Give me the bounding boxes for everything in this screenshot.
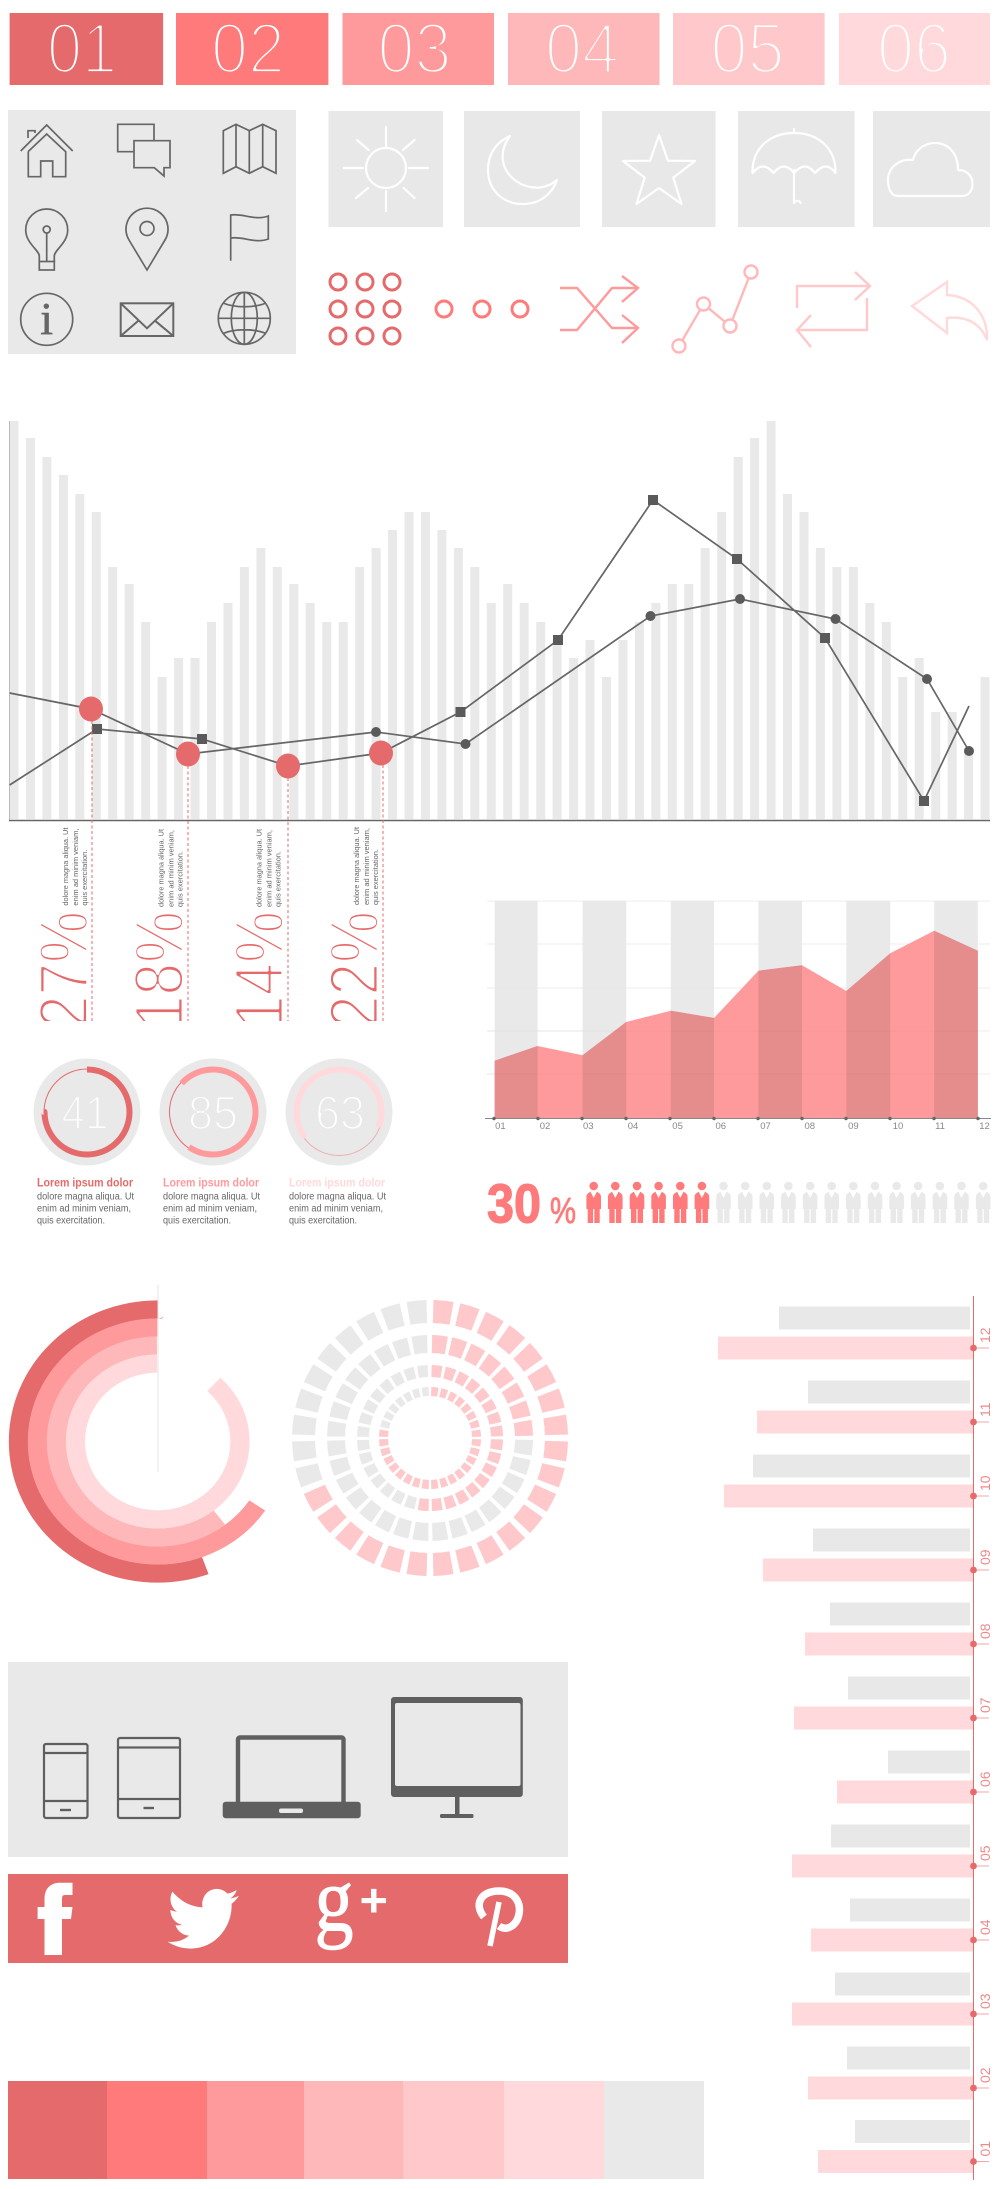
caption 3: dolore magna aliqua. Ut <box>289 1191 386 1202</box>
icon: phone <box>44 1744 88 1818</box>
area axis labels: 12 <box>979 1121 990 1132</box>
icon: envelope <box>121 303 173 336</box>
tile: cloud <box>873 111 990 227</box>
icon: tablet <box>118 1738 180 1818</box>
chart bars <box>14 421 985 819</box>
callout 18%: dolore magna aliqua. Ut <box>156 828 166 907</box>
caption 1: dolore magna aliqua. Ut <box>37 1191 134 1202</box>
caption 3: quis exercitation. <box>289 1216 357 1227</box>
coral line icons row <box>330 266 987 352</box>
area axis labels: 02 <box>540 1121 550 1132</box>
callout 18%: enim ad minim veniam, <box>166 830 176 907</box>
second ring <box>336 1344 524 1532</box>
area axis labels: 03 <box>583 1121 594 1132</box>
tab 04: 04 <box>545 10 619 89</box>
icon: map pin <box>126 208 168 270</box>
gauge 85: 85 <box>188 1086 238 1139</box>
axis labels: 11 <box>977 1402 993 1417</box>
highlighted people <box>586 1182 709 1223</box>
numbered tabs row <box>10 10 990 89</box>
vertical axis <box>972 1296 974 2180</box>
axis labels: 09 <box>977 1549 993 1565</box>
icon: globe <box>218 292 270 344</box>
icon: monitor <box>391 1697 523 1818</box>
callout 27% <box>40 696 103 1021</box>
caption 2: enim ad minim veniam, <box>163 1204 257 1215</box>
segmented radial chart <box>304 1312 556 1564</box>
gauge 41: 41 <box>62 1086 108 1139</box>
axis labels: 06 <box>977 1771 993 1787</box>
icon: shuffle <box>560 276 638 343</box>
tab 01 <box>10 10 163 89</box>
icon: reply arrow <box>912 282 987 340</box>
area axis labels: 05 <box>672 1121 683 1132</box>
callout 22% <box>330 740 393 1021</box>
inner ring <box>384 1392 476 1484</box>
tab 05: 05 <box>710 10 784 89</box>
concentric arc chart <box>18 1285 297 1574</box>
icon: google plus <box>314 1849 388 1950</box>
area chart grey columns <box>495 901 978 1118</box>
tile: moon <box>464 111 580 227</box>
axis labels: 10 <box>977 1475 993 1491</box>
callout 14%: quis exercitation. <box>274 851 282 907</box>
area chart <box>485 901 991 1132</box>
axis labels: 04 <box>977 1919 993 1935</box>
axis labels: 05 <box>977 1845 993 1861</box>
social media bar <box>8 1849 568 1963</box>
grey bars <box>753 1306 970 2143</box>
panel: outline icons <box>8 110 296 354</box>
icon: light bulb <box>26 209 68 270</box>
area axis labels: 04 <box>628 1121 638 1132</box>
round markers <box>371 594 974 756</box>
gauge 63: 63 <box>315 1086 365 1139</box>
tab 05 <box>673 10 825 89</box>
gauges with captions <box>34 1058 392 1227</box>
icon: three dots <box>436 301 528 317</box>
colour palette <box>8 2081 704 2179</box>
icon: laptop <box>223 1738 361 1818</box>
callout 27%: quis exercitation. <box>80 850 89 906</box>
icon: flag <box>231 215 268 261</box>
callout 27%: 27% <box>24 911 102 1028</box>
callout 22%: quis exercitation. <box>371 849 380 905</box>
grey people <box>716 1182 990 1223</box>
tab 02: 02 <box>211 10 285 89</box>
caption 2 <box>163 1178 260 1227</box>
area darker bands <box>495 931 978 1118</box>
axis labels: 03 <box>977 1993 993 2009</box>
icon: info <box>21 293 73 345</box>
outer ring <box>304 1312 556 1564</box>
icon: google plus: g <box>314 1849 354 1950</box>
third ring <box>363 1371 497 1505</box>
icon: dot grid <box>330 274 400 344</box>
chart axis <box>9 820 990 822</box>
caption 2: quis exercitation. <box>163 1216 231 1227</box>
area shape <box>495 931 978 1118</box>
callout 27%: enim ad minim veniam, <box>71 829 80 906</box>
callout 14%: dolore magna aliqua. Ut <box>254 828 264 907</box>
gauge 41 <box>34 1058 140 1166</box>
icon: info: i <box>40 293 53 344</box>
axis labels: 08 <box>977 1623 993 1639</box>
callout 14%: enim ad minim veniam, <box>264 830 274 907</box>
square markers <box>92 495 929 806</box>
30 percent people pictogram <box>487 1172 990 1234</box>
gauge 63 <box>286 1058 392 1166</box>
icon: google plus: + <box>360 1874 388 1926</box>
area axis labels: 09 <box>848 1121 859 1132</box>
area axis labels: 11 <box>935 1121 945 1132</box>
area axis labels: 06 <box>716 1121 726 1132</box>
tab 06 <box>839 10 990 89</box>
tab 04 <box>508 10 660 89</box>
area axis labels: 08 <box>805 1121 815 1132</box>
axis ticks and dots <box>970 1345 989 2165</box>
icon: line graph <box>672 266 758 352</box>
callout 22%: 22% <box>315 911 393 1028</box>
icon: repeat <box>797 272 870 347</box>
callout 18%: 18% <box>120 911 198 1028</box>
icon: facebook <box>38 1883 72 1955</box>
callout 14% <box>236 754 300 1021</box>
area axis labels: 07 <box>760 1121 771 1132</box>
caption 1: Lorem ipsum dolor <box>37 1178 133 1190</box>
panel: devices <box>8 1662 568 1857</box>
caption 1: enim ad minim veniam, <box>37 1204 131 1215</box>
icon: pinterest <box>479 1891 519 1946</box>
area axis labels: 01 <box>495 1121 506 1132</box>
area axis <box>485 1117 991 1120</box>
callout 27%: dolore magna aliqua. Ut <box>61 827 70 906</box>
caption 2: Lorem ipsum dolor <box>163 1178 259 1190</box>
caption 3: Lorem ipsum dolor <box>289 1178 385 1190</box>
axis labels <box>977 1327 993 2156</box>
tab 02 <box>176 10 328 89</box>
callout 22%: dolore magna aliqua. Ut <box>352 826 361 905</box>
icon: twitter <box>168 1889 239 1949</box>
tab 03 <box>342 10 494 89</box>
icon: folded map <box>223 124 276 173</box>
pink bars <box>718 1336 974 2173</box>
data line A <box>10 599 969 754</box>
caption 3: enim ad minim veniam, <box>289 1204 383 1215</box>
30% label: 30 <box>487 1172 541 1234</box>
callout 18% <box>135 742 200 1021</box>
tab 06: 06 <box>877 10 951 89</box>
area axis labels: 10 <box>893 1121 903 1132</box>
tile: sun <box>328 111 443 227</box>
icon: house <box>21 125 73 177</box>
axis labels: 07 <box>977 1697 993 1713</box>
area axis labels <box>495 1121 990 1132</box>
caption 3 <box>289 1178 386 1227</box>
combined bar and line chart <box>9 421 990 820</box>
callout 22%: enim ad minim veniam, <box>362 828 371 905</box>
gauge 85 <box>160 1058 266 1166</box>
30% label: % <box>550 1190 576 1231</box>
tab 01: 01 <box>47 10 117 89</box>
tile: star <box>602 111 716 227</box>
data line B <box>10 500 969 801</box>
weather icon tiles <box>328 111 990 227</box>
percent callouts <box>24 696 393 1028</box>
30% label <box>487 1172 576 1234</box>
axis labels: 02 <box>977 2067 993 2083</box>
caption 1: quis exercitation. <box>37 1216 105 1227</box>
horizontal bar chart <box>718 1296 993 2180</box>
icon: speech bubbles <box>118 124 170 176</box>
axis labels: 12 <box>977 1327 993 1343</box>
callout 18%: quis exercitation. <box>176 851 184 907</box>
tile: umbrella <box>738 111 855 227</box>
callout 14%: 14% <box>220 911 298 1028</box>
caption 2: dolore magna aliqua. Ut <box>163 1191 260 1202</box>
caption 1 <box>37 1178 134 1227</box>
axis labels: 01 <box>977 2141 993 2156</box>
tab 03: 03 <box>378 10 452 89</box>
